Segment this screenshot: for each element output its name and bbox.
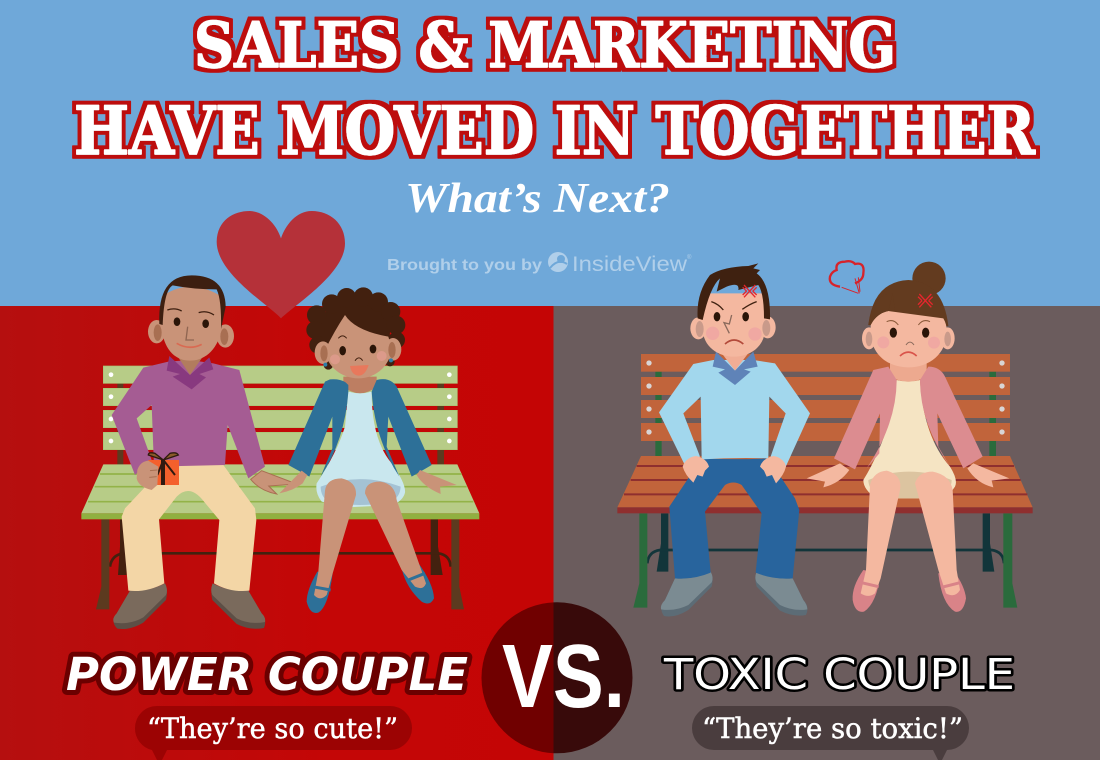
subtitle: What’s Next? [405,176,670,222]
woman in blue cardigan [279,287,457,613]
man in purple sweater [112,275,297,629]
sponsor line: Brought to you by [387,257,542,274]
speech bubble: so toxic [692,706,969,760]
panel: toxic couple background [554,306,1100,760]
green bench [81,366,479,609]
icon: angry puff cloud [830,261,864,293]
speech bubble: so toxic: “They’re so toxic!” [702,712,963,745]
sponsor line [387,252,692,276]
sponsor line: ® [687,254,692,261]
man in blue sweater [659,263,810,617]
speech bubble: so cute [135,706,412,760]
title [74,8,1036,170]
speech bubble: so cute: “They’re so cute!” [147,712,398,745]
orange bench [617,354,1033,608]
panel: power couple background [0,306,554,760]
background: sky [0,0,1100,306]
scene: toxic couple on bench [617,261,1033,617]
heading: power couple: POWER COUPLE [66,648,468,701]
sponsor line: InsideView [572,253,688,276]
icon: InsideView logo [548,252,568,272]
VS badge [482,602,632,753]
icon: heart [217,211,345,318]
title: SALES & MARKETING [194,8,896,82]
VS badge: VS. [502,627,625,727]
heading: toxic couple: TOXIC COUPLE [663,650,1015,700]
scene: power couple on bench [81,211,479,629]
gift box [148,453,179,485]
woman in pink cardigan [807,262,1009,612]
